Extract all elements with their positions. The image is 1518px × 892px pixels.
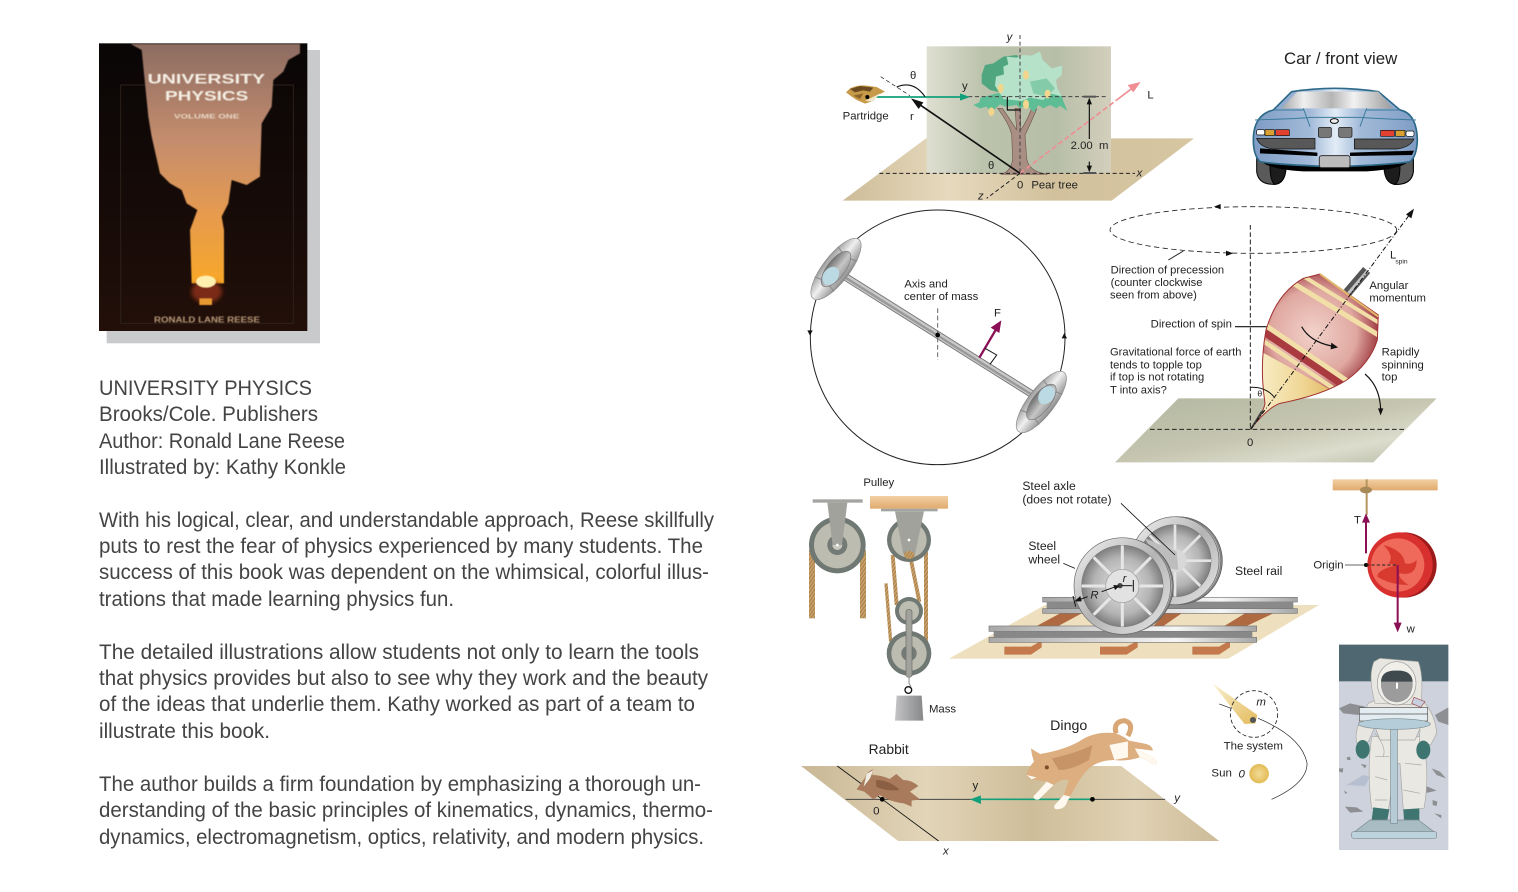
illustration: pulleys	[809, 477, 956, 721]
spindle	[1347, 270, 1368, 293]
hook and ring	[905, 677, 912, 693]
axis points	[880, 797, 1095, 802]
labels	[1022, 479, 1282, 601]
labels	[904, 278, 1001, 320]
labels: T	[1354, 515, 1361, 527]
rod	[845, 277, 1033, 396]
bumper strips	[1260, 148, 1414, 156]
labels: y	[1173, 792, 1181, 804]
labels: Axis and	[904, 278, 948, 290]
label: pulley: Pulley	[863, 477, 895, 489]
moon rocks	[1339, 703, 1448, 818]
reference lines	[1150, 225, 1405, 429]
labels: top	[1382, 372, 1397, 384]
labels: θ	[1257, 389, 1262, 399]
labels: w	[1406, 623, 1416, 635]
back sleepers	[1037, 613, 1273, 626]
tires	[1257, 157, 1413, 184]
labels	[843, 32, 1154, 202]
front wheel	[1074, 538, 1173, 634]
labels: tends to topple top	[1110, 359, 1202, 371]
label: mass: Mass	[929, 704, 956, 716]
ceiling beam	[870, 496, 948, 509]
spin axis with arrow	[1251, 209, 1414, 429]
strap	[906, 609, 912, 677]
upper fixed pulley	[881, 509, 938, 562]
labels: 0	[1238, 768, 1246, 780]
canyon sky	[131, 44, 300, 283]
labels: r	[910, 111, 914, 123]
precession path	[1110, 204, 1397, 260]
cover title: VOLUME ONE	[174, 114, 240, 121]
mass	[895, 696, 923, 721]
sun at horizon	[191, 276, 222, 305]
illustration: car front view	[1253, 49, 1417, 184]
vector r	[911, 98, 1020, 173]
vector p	[867, 93, 970, 101]
labels: z	[977, 190, 984, 202]
force arrow	[979, 320, 1001, 364]
sun	[1249, 764, 1269, 783]
labels: The system	[1224, 741, 1283, 753]
text: book credits: UNIVERSITY PHYSICS	[99, 376, 312, 400]
labels: y	[972, 780, 978, 792]
labels: 0	[1017, 179, 1023, 191]
tension arrow	[1362, 513, 1370, 553]
ground	[949, 605, 1319, 659]
labels: Direction of precession	[1111, 264, 1224, 276]
illustration: partridge and pear tree	[843, 32, 1194, 202]
cover background	[99, 43, 307, 331]
labels: momentum	[1369, 293, 1426, 305]
text: book credits: Author: Ronald Lane Reese	[99, 429, 345, 453]
labels: x	[942, 846, 950, 858]
middle pulley	[895, 597, 923, 625]
radius dimensions	[1073, 580, 1133, 607]
front rail	[989, 626, 1257, 642]
text: paragraph three: The author builds a firm foundation by emphasizing a thorough un-	[99, 772, 701, 796]
weight arrow	[1394, 565, 1402, 632]
cover author: RONALD LANE REESE	[154, 316, 261, 325]
text: paragraph two: that physics provides but also to see why they work and the beauty	[99, 666, 708, 690]
back wall	[927, 46, 1111, 173]
text: paragraph two: illustrate this book.	[99, 719, 270, 743]
illustration: train wheels on rails	[949, 479, 1319, 659]
text: paragraph one: success of this book was dependent on the whimsical, colorful illus-	[99, 560, 709, 584]
labels: L	[1390, 250, 1396, 262]
floor	[1115, 398, 1437, 462]
vector L	[1020, 82, 1141, 173]
labels: Partridge	[843, 110, 889, 122]
labels: Steel	[1028, 539, 1056, 553]
text: book credits: Illustrated by: Kathy Konkle	[99, 455, 346, 479]
text: paragraph three: derstanding of the basic principles of kinematics, dynamics, thermo-	[99, 798, 713, 822]
text: paragraph two: The detailed illustrations allow students not only to learn the tools	[99, 640, 699, 664]
rotation axis	[935, 308, 940, 360]
illustration: yo-yo and astronaut	[1313, 479, 1448, 850]
lights	[1257, 130, 1414, 136]
labels: R	[1090, 589, 1099, 601]
weighing scale	[1352, 708, 1437, 838]
labels: if top is not rotating	[1110, 372, 1204, 384]
left ropes	[809, 550, 866, 618]
text: paragraph two	[99, 640, 708, 743]
labels: x	[1136, 168, 1143, 180]
rabbit	[857, 769, 920, 807]
windshield	[1282, 92, 1393, 108]
cover title: UNIVERSITY	[148, 70, 266, 86]
labels: θ	[910, 70, 916, 82]
text: book credits: Brooks/Cole. Publishers	[99, 402, 318, 426]
cover frame	[121, 85, 293, 323]
labels: Gravitational force of earth	[1110, 347, 1241, 359]
body creases	[1255, 108, 1416, 127]
labels: wheel	[1027, 553, 1060, 567]
labels: T into axis?	[1110, 385, 1167, 397]
text: paragraph two: of the ideas that underlie them. Kathy worked as part of a team to	[99, 692, 695, 716]
cover shadow	[107, 50, 320, 343]
labels: F	[994, 308, 1001, 320]
height dimension	[1083, 96, 1096, 174]
labels: seen from above)	[1110, 289, 1197, 301]
illustration: rabbit and dingo	[801, 683, 1307, 858]
heading: car: Car / front view	[1284, 49, 1398, 68]
pear tree	[973, 52, 1067, 174]
labels: y	[1006, 32, 1014, 44]
ceiling bar	[1333, 479, 1438, 490]
right end mass	[1008, 364, 1075, 440]
license plate	[1319, 156, 1350, 168]
undercarriage	[1260, 160, 1410, 171]
labels: Angular	[1369, 280, 1409, 292]
car body	[1253, 88, 1417, 167]
velocity arrow	[970, 795, 1092, 804]
labels	[1313, 515, 1416, 635]
system: comet and orbit	[1212, 683, 1307, 799]
origin marker	[1345, 563, 1398, 567]
labels: Pear tree	[1031, 179, 1078, 191]
labels: 0	[873, 806, 879, 818]
labels: Origin	[1313, 560, 1344, 572]
illustration: dumbbell rotating in circle	[803, 210, 1075, 465]
yo-yo disk	[1367, 532, 1437, 598]
left end mass	[803, 231, 869, 307]
partridge	[846, 85, 885, 104]
labels: Steel axle	[1022, 479, 1076, 493]
ropes	[884, 552, 928, 643]
labels	[1110, 250, 1426, 449]
ground plane	[801, 766, 1219, 841]
cover title: PHYSICS	[165, 88, 248, 104]
illustration: spinning top	[1110, 204, 1437, 462]
topple arrow	[1365, 374, 1383, 415]
dingo	[1027, 721, 1157, 809]
labels: r	[1123, 573, 1128, 585]
logo	[1330, 119, 1338, 123]
text: paragraph three	[99, 772, 713, 849]
labels: y	[962, 80, 968, 92]
front sleepers	[1004, 641, 1230, 655]
labels: 0	[1247, 437, 1253, 449]
text: book credits	[99, 376, 346, 479]
theta arc	[1250, 387, 1274, 397]
text: paragraph one: trations that made learning physics fun.	[99, 587, 454, 611]
text: paragraph one: puts to rest the fear of physics experienced by many students. The	[99, 534, 703, 558]
axes	[879, 35, 1135, 198]
string and knot	[1360, 479, 1372, 515]
labels: m	[1256, 697, 1266, 709]
labels: (does not rotate)	[1022, 492, 1112, 506]
text: paragraph three: dynamics, electromagnetism, optics, relativity, and modern physics.	[99, 825, 704, 849]
labels: (counter clockwise	[1111, 277, 1202, 289]
labels: center of mass	[904, 291, 979, 303]
labels: θ	[988, 160, 994, 172]
lower pulley	[887, 631, 931, 676]
labels	[869, 697, 1283, 858]
leader lines	[1063, 503, 1175, 568]
angle marks	[897, 85, 1021, 110]
axle	[1145, 538, 1178, 570]
rotation circle	[810, 210, 1065, 465]
labels: Dingo	[1050, 717, 1087, 733]
labels: Rapidly	[1382, 347, 1420, 359]
left pulley	[809, 499, 866, 573]
astronaut background	[1339, 645, 1448, 850]
text: paragraph one	[99, 508, 714, 611]
labels: L	[1147, 90, 1154, 102]
labels: Rabbit	[869, 742, 909, 757]
labels: spinning	[1382, 359, 1424, 371]
labels: spin	[1395, 258, 1408, 265]
air vents	[1318, 127, 1352, 137]
labels: Steel rail	[1235, 564, 1282, 578]
back wheel	[1131, 517, 1222, 605]
top body	[1250, 273, 1379, 430]
labels: 2.00 m	[1071, 140, 1108, 152]
spin direction arrow	[1235, 327, 1338, 349]
ground plane	[843, 138, 1194, 201]
cover title	[148, 70, 266, 121]
text: paragraph one: With his logical, clear, and understandable approach, Reese skillfully	[99, 508, 714, 532]
grilles	[1257, 138, 1414, 149]
labels: Sun	[1211, 768, 1232, 780]
panel: book cover with shadow	[99, 43, 320, 343]
axes	[837, 766, 1165, 841]
astronaut	[1356, 658, 1437, 827]
back rail	[1043, 597, 1297, 613]
direction arrowheads	[807, 330, 1067, 338]
labels: Direction of spin	[1151, 318, 1232, 330]
